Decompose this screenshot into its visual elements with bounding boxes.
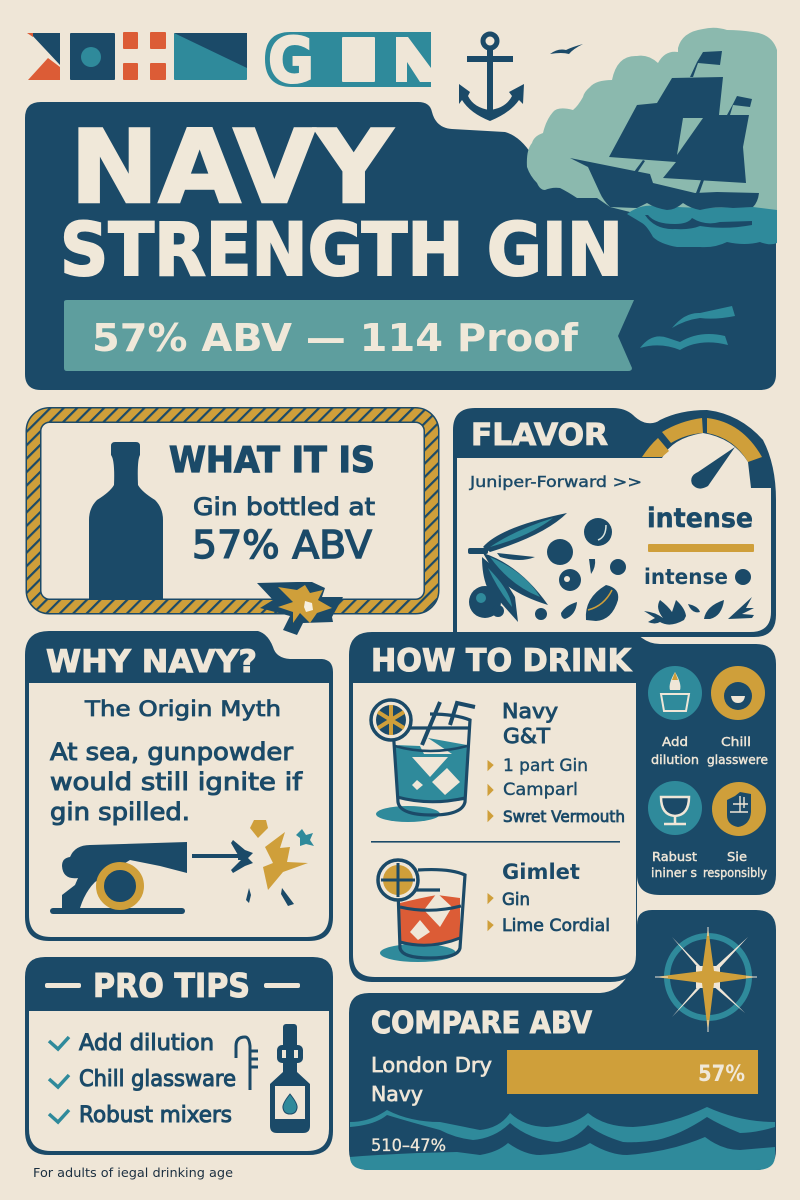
- heading: why navy: WHY NAVY?: [46, 644, 257, 680]
- text: origin story: [50, 738, 303, 826]
- ribbon banner: [64, 300, 634, 371]
- heading: pro tips: [45, 966, 300, 1005]
- icon: bitters bottle: [270, 1024, 310, 1133]
- text: juniper-forward: Juniper-Forward >>: [469, 473, 642, 491]
- icon: candle dilution: [648, 666, 702, 720]
- icon: chill glass: [711, 666, 765, 720]
- text: navy g&t recipe: 1 part Gin: [503, 756, 588, 776]
- icon: seagull: [550, 44, 583, 54]
- divider: [371, 841, 620, 843]
- text: intense with dot: intense: [644, 565, 728, 589]
- icon: bottle: [89, 442, 163, 600]
- icon: small leaves: [644, 597, 754, 625]
- ship silhouette: [570, 51, 759, 229]
- text: navy g&t recipe: Camparl: [503, 780, 578, 800]
- title: NAVY: NAVY: [70, 108, 394, 226]
- text: origin story: gin spilled.: [50, 798, 190, 826]
- text: the origin myth: The Origin Myth: [84, 697, 281, 721]
- labels: lower tips: responsibly: [703, 866, 767, 880]
- footer note: For adults of iegal drinking age: [33, 1166, 233, 1180]
- icon: juniper botanicals: [468, 513, 626, 622]
- panel: pro tips: [25, 957, 333, 1155]
- panel: what it is: [34, 415, 432, 635]
- bar: abv: 57%: [698, 1062, 745, 1087]
- icon: cannon: [50, 842, 187, 914]
- labels: gin styles: London Dry: [371, 1053, 492, 1077]
- text: navy g&t recipe: Navy: [502, 699, 558, 723]
- icon: gimlet glass: [378, 860, 465, 962]
- icon: navy g&t glass: [371, 700, 475, 822]
- gauge: [642, 418, 762, 489]
- header panel: [25, 28, 777, 390]
- waves: [350, 1107, 775, 1170]
- text: gin bottled at: Gin bottled at: [193, 493, 375, 521]
- gold bar: [648, 544, 754, 552]
- tips checklist: Chill glassware: [79, 1067, 236, 1092]
- labels: lower tips: ininer s: [651, 866, 697, 880]
- GIN badge: [265, 24, 431, 97]
- icon: fuse and spark: [192, 820, 314, 906]
- bar: abv: [507, 1050, 758, 1094]
- text: gimlet recipe: Lime Cordial: [502, 916, 610, 936]
- decorative waves: [640, 306, 735, 350]
- GIN badge: G: [268, 24, 314, 97]
- icon: anchor: [459, 34, 524, 121]
- text: 57% ABV: 57% ABV: [192, 523, 372, 567]
- text: origin story: would still ignite if: [50, 768, 303, 796]
- text: abv range: 510–47%: [371, 1136, 446, 1156]
- heading: flavor: FLAVOR: [471, 418, 608, 453]
- panel: flavor: [453, 408, 776, 637]
- labels: top tips: glasswere: [707, 753, 768, 767]
- text: gimlet recipe: [488, 860, 610, 936]
- heading: compare abv: COMPARE ABV: [371, 1006, 593, 1041]
- tips checklist: Add dilution: [79, 1031, 214, 1056]
- panel: how to drink: [349, 632, 776, 982]
- text: gimlet recipe: Gimlet: [502, 860, 580, 884]
- labels: top tips: Add: [662, 735, 688, 749]
- tips checklist: Robust mixers: [79, 1103, 232, 1128]
- labels: lower tips: Sie: [727, 850, 747, 864]
- icon: bar spoon: [236, 1037, 258, 1090]
- text: navy g&t recipe: Swret Vermouth: [503, 807, 625, 826]
- text: navy g&t recipe: [488, 699, 625, 826]
- text: gimlet recipe: Gin: [502, 890, 530, 910]
- icon: compass rose: [655, 927, 757, 1032]
- labels: lower tips: [651, 850, 767, 880]
- icon: robust glass: [648, 781, 702, 835]
- ribbon banner: 57% ABV — 114 Proof: [92, 316, 578, 360]
- title: STRENGTH GIN: STRENGTH GIN: [60, 208, 623, 293]
- ship scene water: [627, 206, 777, 247]
- text: intense: intense: [647, 503, 753, 534]
- labels: lower tips: Rabust: [652, 850, 697, 864]
- labels: gin styles: Navy: [371, 1082, 423, 1106]
- icon: rope burst: [257, 582, 343, 635]
- labels: top tips: Chill: [721, 735, 751, 749]
- panel: compare abv: [349, 910, 776, 1170]
- signal flags: [27, 32, 247, 80]
- icon: sip responsibly: [712, 782, 766, 836]
- labels: top tips: dilution: [651, 753, 699, 767]
- panel: why navy: [25, 631, 333, 941]
- labels: gin styles: [371, 1053, 492, 1106]
- ship scene cloud: [527, 28, 777, 212]
- tips checklist: [49, 1031, 236, 1128]
- text: origin story: At sea, gunpowder: [50, 738, 293, 766]
- heading: how to drink: HOW TO DRINK: [371, 643, 632, 679]
- labels: top tips: [651, 735, 768, 767]
- heading: pro tips: PRO TIPS: [93, 966, 250, 1005]
- heading: what it is: WHAT IT IS: [169, 440, 375, 481]
- text: navy g&t recipe: G&T: [503, 724, 551, 748]
